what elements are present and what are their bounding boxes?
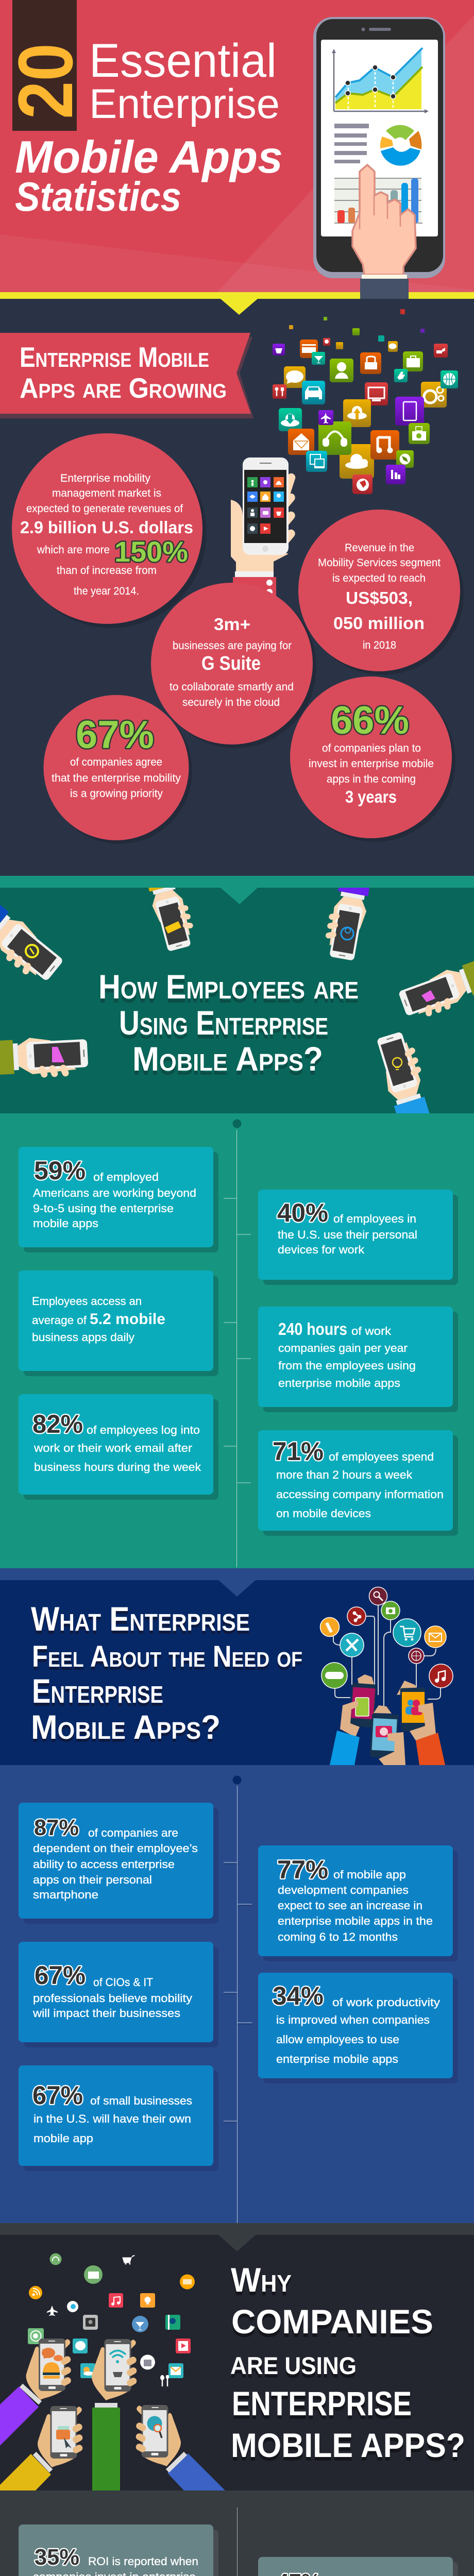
phone: green screen [330,1674,377,1765]
circle: G Suite: to collaborate smartly and [170,681,294,693]
heading: How Employees are [98,968,359,1006]
card: 40 percent: 40% [277,1198,328,1227]
panel: header [0,0,474,299]
banner [0,333,253,418]
icon: envelope [425,1626,446,1648]
icon: video [434,344,448,358]
card: 5.2 mobile: Employees access an [32,1295,142,1308]
card: 59 percent: Americans are working beyond [33,1187,196,1199]
heading: What Enterprise [31,1600,250,1638]
card: 34 percent: 34% [273,1981,324,2010]
heading: COMPANIES [231,2302,433,2341]
card: 87 percent: smartphone [33,1888,98,1901]
donut chart [380,125,421,166]
title [15,35,283,219]
card: 59 percent [19,1147,218,1252]
circle: market revenue: than of increase from [57,565,157,577]
icon: chat [73,2338,88,2353]
panel: employee stats [0,1113,474,1568]
card: 87 percent [19,1803,218,1924]
banner: Enterprise Mobile [20,341,209,373]
icon: person [330,359,353,382]
circle: 66 percent [290,676,455,842]
app icons cluster [273,309,458,494]
card: 77 percent: expect to see an increase in [278,1899,422,1912]
title badge: 20: 20 [2,43,89,119]
circle: mobility services revenue: Revenue in the [345,542,414,554]
phone: wifi [92,2339,138,2490]
icon: big cloud [340,444,374,479]
icon: music [370,430,399,460]
icon: gift [140,2354,155,2370]
icon: camera [83,2315,98,2330]
icon: lock [360,352,381,374]
card: 240 hours: from the employees using [278,1359,416,1372]
heading: ARE USING [230,2352,357,2379]
panel: enterprise mobile apps growing [0,299,474,876]
icon: globe [409,1648,424,1664]
circle: G Suite: securely in the cloud [182,697,280,708]
area chart [332,48,429,113]
circle: market revenue: management market is [52,487,161,499]
circle: 66 percent: 3 years [345,787,397,806]
card: 240 hours [258,1307,458,1412]
icon: bulb [140,2293,155,2308]
icon: camera [409,423,430,444]
icon: cocktail [132,2316,148,2332]
hands and app circles illustration [320,1587,453,1765]
card: 67 percent small businesses [19,2065,218,2171]
card: 71 percent: of employees spend [329,1450,434,1463]
list bars [334,124,369,163]
phone: globe [134,2405,225,2490]
phone: bulb [377,1032,430,1113]
card: 71 percent: 71% [273,1437,324,1466]
circle: 67 percent: is a growing priority [70,788,163,800]
card: 240 hours: 240 hours [278,1319,347,1338]
icon: compass [396,450,414,468]
hand holding phone [231,457,297,603]
circle: market revenue: 150% [114,535,188,568]
title: Enterprise [89,81,280,127]
icon: briefcase [84,2265,103,2284]
icon: monitor [365,382,388,405]
card: 67 percent small businesses: mobile app [33,2132,93,2145]
heading [230,2261,465,2464]
icon: fork [273,384,286,399]
panel: what enterprise feel heading [0,1568,474,1766]
card: 59 percent: 59% [34,1156,86,1185]
icon: bars [386,465,405,484]
card: 67 percent small businesses: of small businesses [90,2094,192,2107]
icon: plane [47,2306,58,2316]
card: 77 percent: of mobile app [333,1868,406,1881]
title: Statistics [15,174,181,219]
card: 5.2 mobile: average of [32,1314,87,1327]
circle: G Suite: 3m+ [214,615,250,634]
panel: how employees heading [0,876,474,1113]
card: 87 percent: dependent on their employee’s [33,1842,198,1855]
card: 5.2 mobile [19,1270,218,1376]
phone: orange screen [397,1681,445,1765]
bar chart [334,178,422,223]
panel: company reasons stats [0,2490,474,2576]
phone: pink arrows [0,1038,88,1078]
heading: Feel About the Need of [32,1640,302,1673]
circle: mobility services revenue [298,510,464,675]
circle: 67 percent: 67% [76,713,154,757]
timeline [224,1775,252,2223]
circle: market revenue: expected to generate revenues of [26,503,183,515]
card: 67 percent CIOs: will impact their businesses [32,2007,180,2020]
card: 40 percent [258,1190,458,1285]
heading [31,1600,302,1746]
card: 87 percent: of companies are [88,1826,178,1839]
card: 67 percent small businesses: 67% [32,2081,83,2110]
card: 34 percent [258,1973,458,2083]
card: 67 percent CIOs: 67% [35,1961,86,1990]
icon: card [300,340,318,358]
card: 82 percent [19,1394,218,1500]
circle: 66 percent: 66% [331,699,409,742]
icon: tools [340,1633,364,1657]
card: 77 percent: enterprise mobile apps in the [278,1914,433,1927]
heading: ENTERPRISE [232,2384,412,2422]
circle: market revenue: Enterprise mobility [60,472,150,484]
icon: cocktail [312,352,325,365]
circle: 66 percent: apps in the coming [327,773,416,785]
phones held in hands [0,888,474,1113]
heading: Using Enterprise [119,1004,328,1042]
panel: enterprise feel stats [0,1765,474,2223]
circle: 67 percent [43,695,192,844]
circle: market revenue: which are more [37,544,110,556]
phone: sync dollar [0,905,62,980]
heading: Mobile Apps? [132,1040,323,1078]
timeline [224,1119,251,1567]
icon: music [429,1664,453,1688]
card: 40 percent: devices for work [278,1243,365,1256]
circle: mobility services revenue: in 2018 [363,639,396,651]
card: 59 percent: 9-to-5 using the enterprise [33,1202,174,1215]
icon: small globe [323,338,330,346]
icon: cloud download [279,408,302,431]
circle: 67 percent: of companies agree [70,756,162,768]
card: 67 percent CIOs [19,1942,218,2047]
title: Essential [89,35,277,87]
circle: mobility services revenue: US$503, [346,588,413,607]
circle: market revenue: 2.9 billion U.S. dollars [20,518,193,537]
card: 77 percent: development companies [278,1884,409,1896]
icon: magnifier [369,1587,387,1605]
phone: envelope [148,888,193,951]
card: 35 percent: ROI is reported when [88,2555,198,2568]
card: 47 percent [258,2557,458,2576]
card: 40 percent: the U.S. use their personal [278,1228,417,1241]
icon: cart [393,1619,421,1647]
circle: mobility services revenue: is expected to reach [332,572,426,584]
icon: speech [284,366,306,388]
circle: mobility services revenue: Mobility Services segment [318,557,441,569]
heading: Enterprise [32,1672,163,1710]
icon: gamepad [321,1663,347,1688]
phone: food [0,2338,72,2446]
icon: cart [123,2256,135,2265]
card: 35 percent: 35% [35,2545,79,2570]
card: 67 percent CIOs: professionals believe mobility [33,1992,192,2005]
card: 71 percent: more than 2 hours a week [276,1468,413,1481]
circle: 67 percent: that the enterprise mobility [52,772,181,784]
card: 5.2 mobile: business apps daily [32,1331,134,1344]
icon: briefcase [403,351,423,371]
phone: pink building [399,961,474,1016]
icon: basketball [441,370,458,388]
icon: photos [306,451,327,472]
card: 40 percent: of employees in [333,1212,416,1225]
icon: car [302,381,325,404]
card: 82 percent: of employees log into [87,1423,200,1436]
card: 34 percent: enterprise mobile apps [276,2053,398,2065]
icon: plane [318,410,333,425]
timeline [222,2507,252,2576]
banner: Apps are Growing [20,372,227,404]
circle: G Suite: G Suite [201,653,261,674]
card: 240 hours: of work [351,1325,392,1337]
card: 71 percent: on mobile devices [276,1507,371,1520]
card: 34 percent: allow employees to use [276,2033,399,2046]
title: Mobile Apps [15,131,283,182]
icon: headphones [49,2253,62,2265]
phone: globe [326,888,369,960]
title badge: 20 [2,0,89,131]
circle: mobility services revenue: 050 million [333,614,425,633]
icon: globe [28,2328,44,2344]
card: 87 percent: apps on their personal [33,1873,152,1886]
icon: gears [421,382,447,408]
icon: mail [180,2274,195,2290]
card: 35 percent [19,2524,218,2576]
circle: 66 percent: of companies plan to [322,742,421,754]
icon: speech small [388,341,398,352]
card: 77 percent: 77% [277,1855,328,1884]
card: 59 percent: of employed [93,1171,159,1183]
card: 82 percent: work or their work email after [33,1442,192,1454]
card: 71 percent: accessing company information [276,1488,444,1501]
card: 87 percent: ability to access enterprise [33,1858,175,1871]
card: 5.2 mobile: 5.2 mobile [90,1311,165,1328]
circle: market revenue [12,433,207,628]
icon: phone call [320,1618,339,1636]
phone: mail [0,2406,84,2490]
card: 67 percent CIOs: of CIOs & IT [93,1976,153,1989]
circle: 66 percent: invest in enterprise mobile [309,758,434,770]
icon: tablet [395,397,424,426]
icon: camera [381,1601,400,1620]
icon: share [347,1607,366,1625]
card: 87 percent: 87% [34,1815,79,1840]
card: 67 percent small businesses: in the U.S. will have their own [33,2112,191,2125]
circle: market revenue: the year 2014. [74,585,139,597]
circle: G Suite: businesses are paying for [173,640,292,652]
icon: weather [80,2363,95,2378]
heading: Why [231,2261,292,2299]
card: 240 hours: companies gain per year [278,1342,408,1354]
icon: mail square [168,2363,183,2378]
heading [98,968,359,1078]
icon: video [176,2338,191,2353]
icon: bird [67,2301,78,2312]
card: 59 percent: mobile apps [33,1217,98,1230]
icon: basket [273,344,285,355]
card: 82 percent: 82% [32,1410,83,1438]
card: 77 percent [258,1845,458,1961]
card: 34 percent: is improved when companies [276,2013,430,2026]
floating app icons [28,2253,195,2386]
heading: Mobile Apps? [31,1708,221,1746]
icon: headphones [318,421,351,455]
icon: globe [352,474,373,494]
card: 71 percent [258,1430,458,1536]
icon: rss [29,2286,42,2299]
card: 34 percent: of work productivity [332,1996,440,2009]
icon: fork and spoon [160,2375,169,2386]
icon: map [165,2315,180,2330]
icon: cloud upload [343,399,371,427]
card: 240 hours: enterprise mobile apps [278,1377,400,1389]
card: 82 percent: business hours during the week [34,1461,201,1473]
icon: mail [288,429,314,455]
icon: music [109,2293,123,2308]
icon: thumb [394,369,408,382]
circle: G Suite [151,583,316,748]
panel: why companies heading [0,2223,474,2490]
icon: pointing hand [352,165,416,299]
phone: camera screen [370,1705,405,1765]
card: 77 percent: coming 6 to 12 months [278,1930,398,1943]
phone with dashboard [313,17,445,278]
